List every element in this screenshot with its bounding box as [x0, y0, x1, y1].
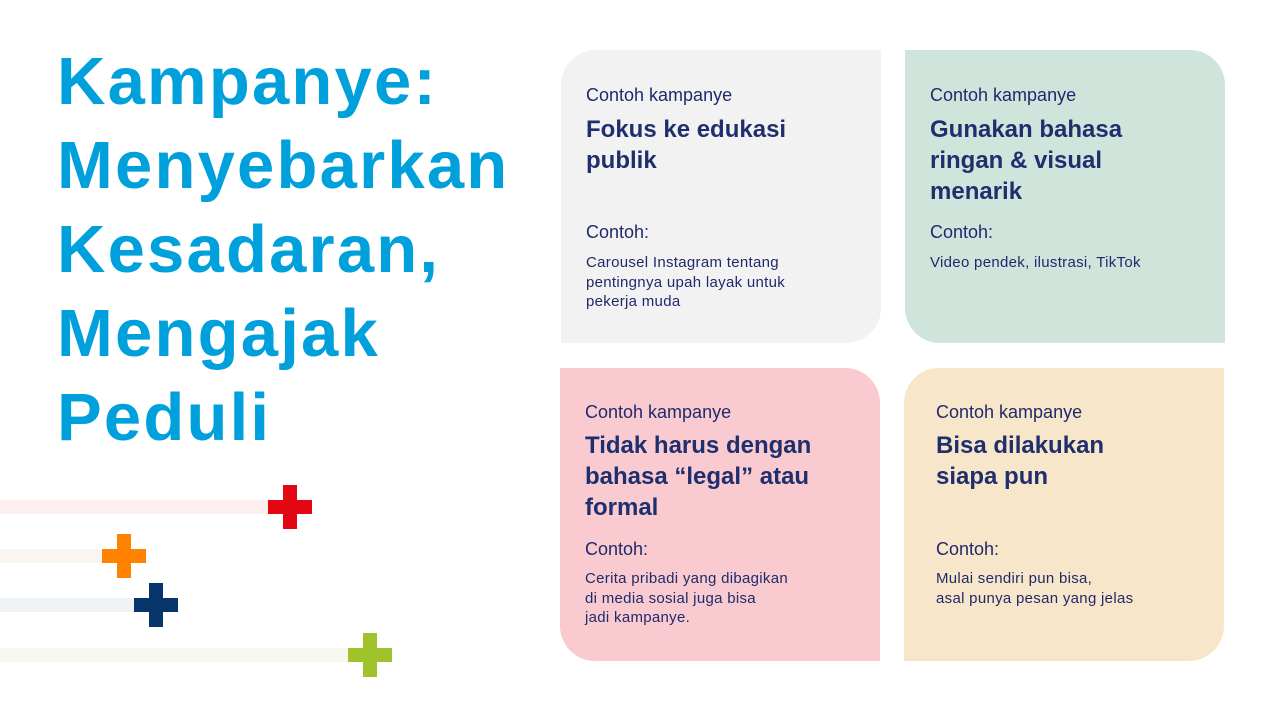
body text: jadi kampanye. [585, 609, 690, 626]
heading: ringan & visual [930, 147, 1102, 174]
panel: bahasa ringan: Contoh kampanye [930, 85, 1076, 105]
body text [586, 254, 785, 310]
panel: fokus ke edukasi publik: Contoh kampanye [586, 85, 732, 105]
body text: Cerita pribadi yang dibagikan [585, 570, 788, 587]
heading: publik [586, 147, 657, 174]
heading: menarik [930, 178, 1022, 205]
panel: siapa pun: Contoh kampanye [936, 402, 1082, 422]
title: Mengajak [57, 296, 380, 371]
panel: siapa pun: Contoh: [936, 539, 999, 559]
panel: tidak harus legal [560, 368, 880, 661]
decoration: green bar and plus [0, 633, 392, 677]
heading: Fokus ke edukasi [586, 116, 786, 143]
body text [584, 570, 788, 626]
panel: fokus ke edukasi publik [561, 50, 881, 343]
decoration: orange bar and plus [0, 534, 146, 578]
body text: pekerja muda [586, 293, 680, 310]
body text: pentingnya upah layak untuk [586, 274, 785, 290]
panel: bahasa ringan [905, 50, 1225, 343]
title: Menyebarkan [57, 128, 509, 203]
heading: siapa pun [936, 463, 1048, 490]
body text: Video pendek, ilustrasi, TikTok [930, 254, 1141, 271]
heading [936, 432, 1104, 490]
title [57, 44, 509, 455]
body text: Carousel Instagram tentang [586, 254, 779, 271]
title: Kesadaran, [57, 212, 440, 287]
panel: siapa pun [904, 368, 1224, 661]
heading: formal [585, 494, 658, 521]
decoration: red bar and plus [0, 485, 312, 529]
body text [936, 570, 1133, 606]
title: Kampanye: [57, 44, 438, 119]
heading: bahasa “legal” atau [585, 463, 809, 490]
body text: Mulai sendiri pun bisa, [936, 570, 1092, 587]
heading: Bisa dilakukan [936, 432, 1104, 459]
decoration: navy bar and plus [0, 583, 178, 627]
heading [930, 116, 1122, 205]
panel: bahasa ringan: Contoh: [930, 222, 993, 242]
panel: tidak harus legal: Contoh kampanye [585, 402, 731, 422]
panel: tidak harus legal: Contoh: [585, 539, 648, 559]
heading: Tidak harus dengan [585, 432, 811, 459]
heading [586, 116, 786, 174]
title: Peduli [57, 380, 271, 455]
heading [585, 432, 811, 521]
body text: asal punya pesan yang jelas [936, 590, 1133, 606]
body text: di media sosial juga bisa [585, 590, 756, 606]
heading: Gunakan bahasa [930, 116, 1122, 143]
panel: fokus ke edukasi publik: Contoh: [586, 222, 649, 242]
